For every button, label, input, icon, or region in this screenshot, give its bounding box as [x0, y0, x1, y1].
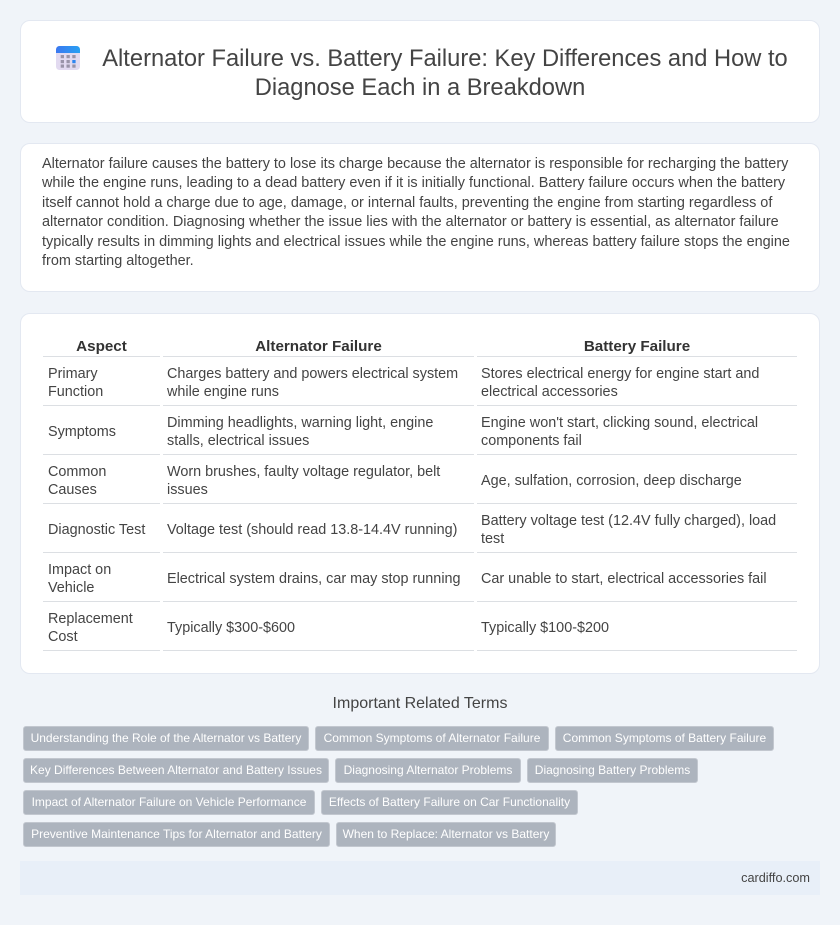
comparison table: Car unable to start, electrical accessories fail — [481, 571, 767, 587]
header: battery failure: Battery Failure — [584, 338, 690, 355]
header card — [20, 20, 820, 123]
intro text: itself cannot hold a charge due to age, damage, or internal faults, preventing the engine from starting regardless of — [42, 195, 772, 211]
row: impact on vehicle: Impact on — [48, 562, 111, 578]
comparison table: test — [481, 531, 504, 547]
row: replacement cost: Replacement — [48, 611, 133, 627]
row: primary function: Primary — [48, 366, 98, 382]
header: aspect: Aspect — [76, 338, 127, 355]
related term chips: Common Symptoms of Alternator Failure — [324, 731, 540, 745]
comparison table: electrical accessories — [481, 384, 618, 400]
comparison table panel — [20, 313, 820, 674]
comparison table: Age, sulfation, corrosion, deep discharge — [481, 473, 742, 489]
intro text: from starting altogether. — [42, 253, 194, 269]
icon: calendar — [56, 46, 80, 70]
comparison table: components fail — [481, 433, 582, 449]
row: replacement cost: Cost — [48, 629, 78, 645]
title: Alternator Failure vs. Battery Failure: Key Differences and How to — [102, 46, 788, 72]
row: primary function: Function — [48, 384, 103, 400]
row: diagnostic test: Diagnostic Test — [48, 522, 145, 538]
intro text — [42, 156, 790, 269]
related term chips: Preventive Maintenance Tips for Alternator and Battery — [31, 827, 322, 841]
intro text: typically results in dimming lights and electrical issues while the engine runs, whereas battery failure stops the engine — [42, 234, 790, 250]
related term chips: Diagnosing Battery Problems — [535, 763, 690, 777]
title — [102, 46, 788, 101]
intro text: while the engine runs, leading to a dead battery even if it is initially functional. Battery failure occurs when the battery — [42, 175, 785, 191]
comparison table: Battery voltage test (12.4V fully charged), load — [481, 513, 776, 529]
comparison table: issues — [167, 482, 208, 498]
comparison table: stalls, electrical issues — [167, 433, 309, 449]
row: replacement cost — [48, 611, 133, 645]
footer bar — [20, 861, 820, 895]
row: primary function — [48, 366, 103, 400]
intro text: alternator condition. Diagnosing whether the issue lies with the alternator or battery is essential, as alternator failure — [42, 214, 779, 230]
comparison table: Typically $100-$200 — [481, 620, 609, 636]
row: common causes: Causes — [48, 482, 97, 498]
intro text: Alternator failure causes the battery to lose its charge because the alternator is responsible for recharging the battery — [42, 156, 788, 172]
related term chips — [23, 726, 774, 847]
row: common causes: Common — [48, 464, 106, 480]
comparison table — [43, 338, 797, 651]
related term chips: Key Differences Between Alternator and Battery Issues — [30, 763, 322, 777]
related term chips: Understanding the Role of the Alternator vs Battery — [31, 731, 301, 745]
comparison table: Dimming headlights, warning light, engine — [167, 415, 433, 431]
header: alternator failure: Alternator Failure — [255, 338, 382, 355]
related term chips: Impact of Alternator Failure on Vehicle Performance — [32, 795, 306, 809]
row: impact on vehicle: Vehicle — [48, 580, 94, 596]
site name: cardiffo.com — [741, 871, 810, 885]
row: common causes — [48, 464, 106, 498]
comparison table: Engine won't start, clicking sound, electrical — [481, 415, 758, 431]
related term chips: When to Replace: Alternator vs Battery — [343, 827, 549, 841]
comparison table: while engine runs — [167, 384, 279, 400]
comparison table: Voltage test (should read 13.8-14.4V running) — [167, 522, 457, 538]
intro text panel — [20, 143, 820, 292]
comparison table: Typically $300-$600 — [167, 620, 295, 636]
related term chips: Diagnosing Alternator Problems — [344, 763, 512, 777]
comparison table: Electrical system drains, car may stop running — [167, 571, 461, 587]
related term chips: Effects of Battery Failure on Car Functionality — [329, 795, 570, 809]
row: symptoms: Symptoms — [48, 424, 116, 440]
comparison table: Worn brushes, faulty voltage regulator, belt — [167, 464, 440, 480]
title: Diagnose Each in a Breakdown — [255, 75, 585, 101]
related term chips: Common Symptoms of Battery Failure — [563, 731, 766, 745]
comparison table: Charges battery and powers electrical system — [167, 366, 458, 382]
related terms heading: Important Related Terms — [333, 695, 507, 712]
comparison table: Stores electrical energy for engine start and — [481, 366, 759, 382]
row: impact on vehicle — [48, 562, 111, 596]
